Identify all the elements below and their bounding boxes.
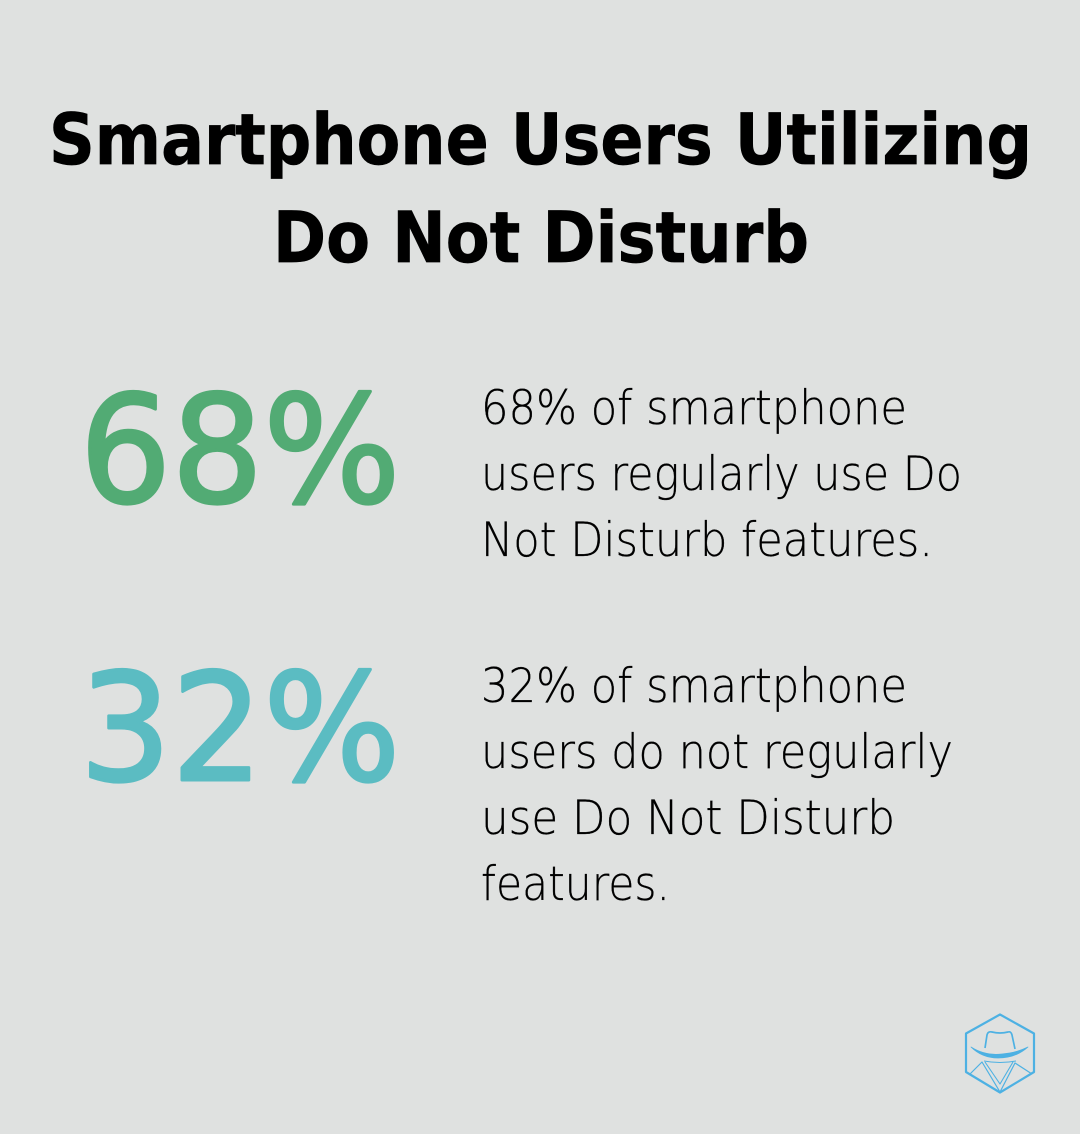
text block: 68% description — [481, 381, 962, 568]
icon: detective logo in hexagon — [966, 1014, 1034, 1092]
text block: 68% description: Not Disturb features. — [481, 513, 933, 568]
text block: 68% description: users regularly use Do — [481, 447, 962, 502]
text block: 32% description: features. — [481, 857, 670, 912]
text block: 68% description: 68% of smartphone — [481, 381, 907, 436]
stat: 32%: 32% — [80, 643, 400, 816]
text block: 32% description — [481, 659, 953, 912]
stat: 68%: 68% — [80, 365, 400, 538]
title: Do Not Disturb — [273, 197, 809, 279]
text block: 32% description: use Do Not Disturb — [481, 791, 895, 846]
text block: 32% description: users do not regularly — [481, 725, 953, 780]
text block: 32% description: 32% of smartphone — [481, 659, 907, 714]
title — [49, 99, 1032, 279]
